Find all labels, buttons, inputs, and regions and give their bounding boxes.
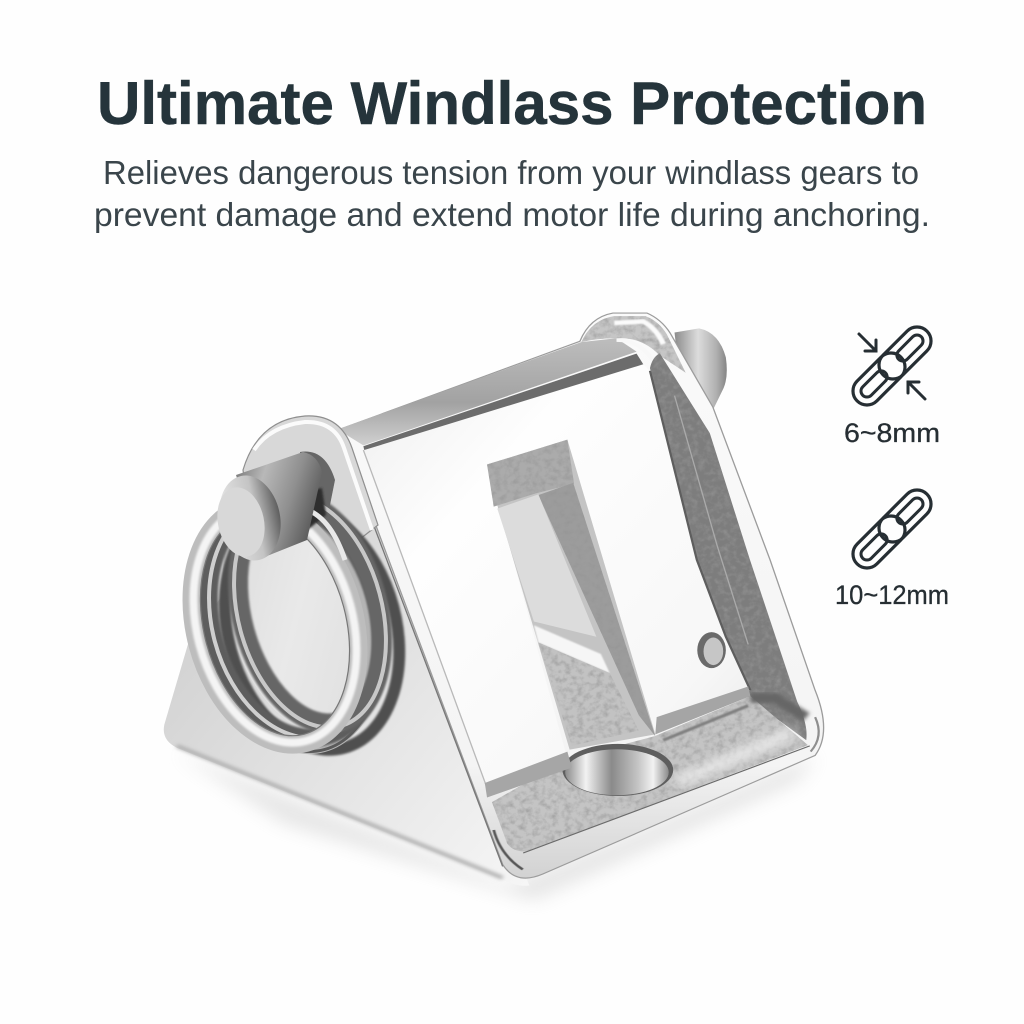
lower link: [847, 347, 911, 411]
front rim: [337, 313, 824, 878]
title: Ultimate Windlass Protection: [97, 70, 927, 137]
tray shadow under foot: [663, 706, 748, 740]
top rear bar: [337, 338, 637, 445]
tray highlight: [677, 732, 793, 782]
slot opening: [487, 440, 655, 750]
small pin hole: [697, 632, 726, 668]
right channel: [650, 353, 807, 740]
bottom tray: [492, 696, 808, 851]
front flange: [243, 416, 378, 570]
plate right edge: [650, 371, 750, 690]
lower link: [847, 510, 911, 574]
countersunk hole: [562, 744, 673, 796]
upper link: [873, 484, 937, 548]
right foot: [655, 687, 750, 734]
slot bright wedge: [497, 494, 596, 637]
side face: [164, 438, 529, 886]
icon: chain with compress arrows: [847, 321, 937, 411]
channel ridge line: [675, 396, 748, 644]
ground shadow: [177, 752, 815, 901]
front left corner shade: [494, 830, 523, 869]
product photo: chain stopper: [164, 313, 824, 901]
ring, pin and flange, in page pixels: [166, 416, 425, 772]
label: 6~8mm: 6~8mm: [844, 418, 940, 448]
recess disc: [198, 471, 398, 749]
label: 10~12mm: 10~12mm: [835, 580, 949, 610]
arrow top left: [859, 334, 876, 351]
tray dark corner: [750, 698, 806, 717]
subtitle text block: [94, 154, 930, 233]
slot white reflection: [534, 625, 610, 673]
tray front line: [523, 746, 810, 853]
rear pin: [675, 328, 727, 409]
arrow bottom right: [908, 382, 925, 399]
plate foot over hole: [485, 752, 572, 798]
icon: chain: [847, 484, 937, 574]
upper link: [873, 321, 937, 385]
slot side wall: [538, 483, 655, 736]
side face lower edge: [177, 746, 503, 878]
corner reflection: [811, 717, 819, 752]
dark gap behind ring: [297, 488, 326, 532]
plate left edge: [363, 450, 487, 788]
split ring: [166, 478, 425, 772]
top plate: [363, 361, 750, 788]
subtitle text block: prevent damage and extend motor life during anchoring.: [94, 196, 930, 233]
slot top bar: [487, 440, 574, 507]
rear flange detail: [581, 316, 686, 373]
rim outer left line: [346, 453, 503, 866]
subtitle text block: Relieves dangerous tension from your windlass gears to: [103, 154, 919, 191]
ring strand at pin: [302, 508, 345, 560]
slot lower reflection: [538, 643, 639, 746]
plate top edge: [363, 354, 643, 450]
front pin: [211, 452, 322, 566]
